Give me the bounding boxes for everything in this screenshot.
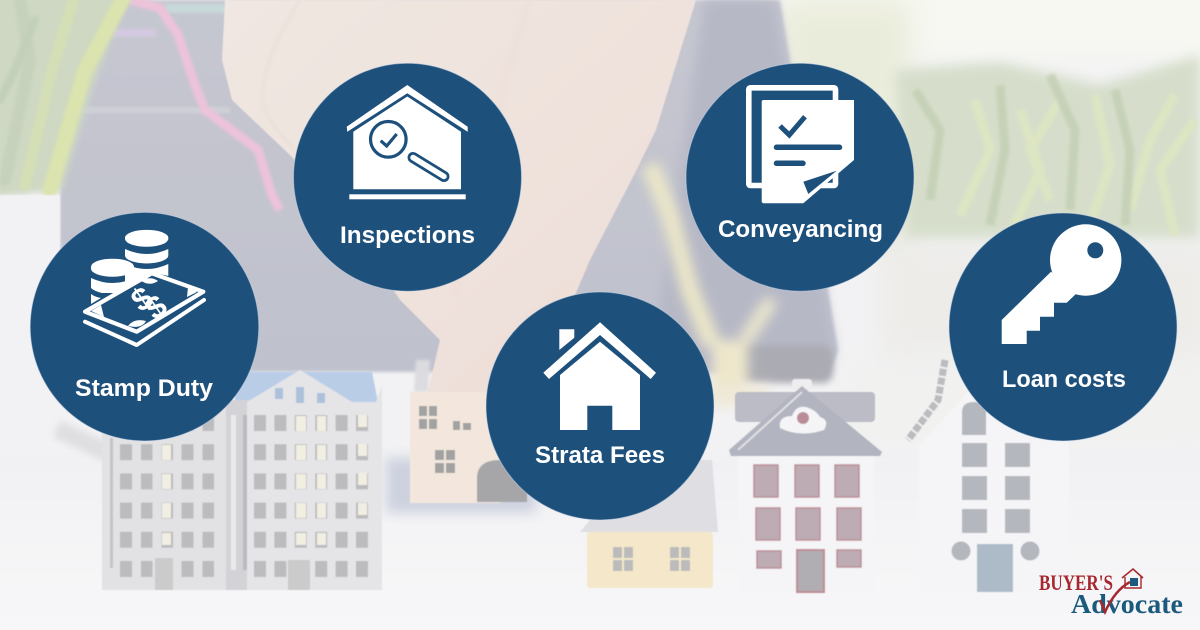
background: left plant and pot	[0, 0, 128, 345]
circle: Strata Fees	[486, 292, 714, 520]
icon: documents with check mark	[749, 88, 854, 203]
background: trophy	[650, 165, 772, 407]
label: Inspections: Inspections	[340, 222, 475, 249]
circle: Conveyancing	[686, 63, 914, 291]
label: Loan costs: Loan costs	[1002, 366, 1126, 393]
label: Stamp Duty: Stamp Duty	[75, 375, 214, 402]
model: white house with key	[908, 360, 1069, 592]
icon: coins and banknote: $	[124, 279, 160, 319]
model: peach house held by fingers	[410, 392, 527, 503]
icon: coins and banknote: $	[138, 287, 174, 327]
model: white house with red windows	[729, 379, 882, 592]
model: yellow house	[580, 460, 718, 588]
background: monitor	[60, 0, 838, 383]
logo: Buyer's Advocate	[1039, 569, 1183, 619]
circle: Stamp Duty	[30, 212, 259, 441]
icon: coins and banknote	[85, 230, 204, 345]
logo: Buyer's Advocate: Advocate	[1071, 589, 1183, 619]
logo: Buyer's Advocate: BUYER'S	[1039, 570, 1113, 595]
icon: house with magnifying glass	[347, 85, 468, 199]
label: Strata Fees: Strata Fees	[535, 442, 665, 469]
background: right side wash	[770, 0, 1200, 450]
background: table surface	[0, 421, 1200, 630]
background: hand	[222, 0, 696, 420]
background: right plant	[895, 55, 1200, 238]
circle: Loan costs	[949, 213, 1177, 441]
icon: key	[1002, 224, 1121, 344]
circle: Inspections	[294, 63, 522, 291]
icon: logo house	[1122, 569, 1143, 588]
model: large apartment building	[102, 370, 382, 590]
icon: house with chimney	[543, 322, 656, 430]
label: Conveyancing: Conveyancing	[718, 216, 883, 243]
